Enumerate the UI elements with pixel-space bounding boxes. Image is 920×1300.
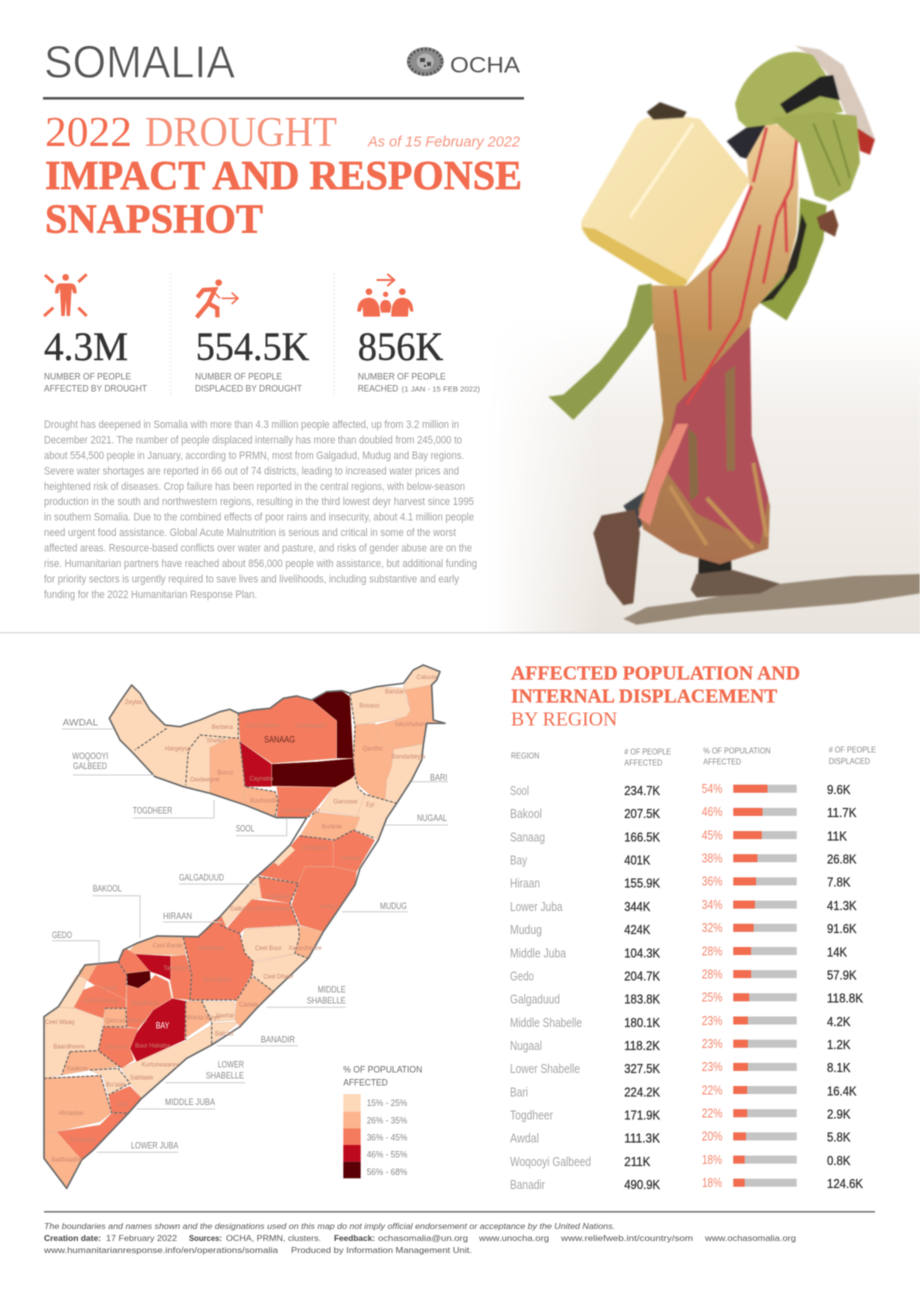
map north regions bbox=[109, 665, 445, 992]
text block: situation overview: need urgent food assistance. Global Acute Malnutrition is serious and critical in some of the worst bbox=[44, 527, 456, 539]
map leader labels: BARI bbox=[430, 773, 447, 784]
row: Galgaduud: Galgaduud bbox=[510, 993, 560, 1007]
row: Bakool: 207.5K bbox=[624, 807, 661, 821]
heading: affected population by region: BY REGION bbox=[511, 709, 617, 731]
map region names bbox=[156, 734, 295, 1031]
row: Middle Juba bbox=[510, 944, 848, 960]
row: Nugaal: 23% bbox=[702, 1037, 722, 1051]
map district labels: Iskushuban bbox=[395, 722, 426, 728]
text block: situation overview: affected areas. Resource-based conflicts over water and pasture, and risks of gender abuse are on the bbox=[44, 543, 472, 555]
row: Nugaal: 1.2K bbox=[827, 1038, 851, 1052]
row: Bari bbox=[510, 1083, 857, 1099]
header rule bbox=[43, 97, 524, 100]
divider: photo section base line bbox=[0, 632, 920, 634]
row: Sool bbox=[510, 782, 851, 798]
footer text: 17 February 2022 bbox=[106, 1233, 177, 1243]
map region names: SANAAG bbox=[264, 734, 295, 746]
map boundaries bbox=[44, 665, 445, 1188]
legend: % of population affected: AFFECTED bbox=[343, 1078, 388, 1089]
row: Sool: 234.7K bbox=[624, 784, 661, 798]
footer text bbox=[43, 1221, 796, 1255]
table header: DISPLACED bbox=[829, 757, 870, 766]
row: Bari: 224.2K bbox=[624, 1085, 661, 1099]
legend: % of population affected: 36% - 45% bbox=[367, 1133, 408, 1144]
map leader labels: GALBEED bbox=[73, 761, 107, 772]
row: Sool: 9.6K bbox=[827, 783, 851, 797]
row: Mudug: 91.6K bbox=[827, 922, 857, 936]
stat: people displaced: 554.5K bbox=[196, 324, 309, 369]
row: Sanaag: 45% bbox=[702, 828, 722, 842]
map: Somalia population affected choropleth: Buur Hakaba bbox=[135, 1043, 171, 1049]
heading: 2022 drought: 2022 bbox=[45, 110, 132, 156]
heading: 2022 drought: DROUGHT bbox=[145, 110, 337, 156]
map district labels: Bandar bbox=[385, 689, 404, 695]
row: Awdal: Awdal bbox=[510, 1132, 539, 1146]
row: Hiraan: 155.9K bbox=[624, 877, 661, 891]
row: Togdheer: 171.9K bbox=[624, 1108, 661, 1122]
heading: impact and response snapshot bbox=[45, 152, 522, 242]
map leader labels: BANADIR bbox=[261, 1034, 295, 1045]
row: Mudug bbox=[510, 921, 857, 937]
map: Somalia population affected choropleth: Badhaadhe bbox=[52, 1158, 83, 1164]
footer text: Feedback: bbox=[334, 1233, 375, 1243]
row: Bay bbox=[510, 852, 857, 868]
stat: people displaced: NUMBER OF PEOPLE bbox=[195, 371, 282, 382]
heading: 2022 drought bbox=[45, 110, 337, 156]
row: Sanaag: 166.5K bbox=[624, 830, 661, 844]
row: Hiraan: 7.8K bbox=[827, 876, 851, 890]
footer text: ochasomalia@un.org bbox=[378, 1233, 468, 1243]
row: Gedo bbox=[510, 967, 857, 983]
row: Hiraan: 36% bbox=[702, 875, 722, 889]
icon: person affected bbox=[44, 274, 87, 316]
row: Woqooyi Galbeed: 211K bbox=[624, 1155, 651, 1169]
text block: situation overview: in southern Somalia. Due to the combined effects of poor rains and insecurity, about 4.1 million people bbox=[44, 512, 474, 524]
heading: affected population by region: INTERNAL DISPLACEMENT bbox=[511, 686, 778, 708]
map district labels: Xarardheere bbox=[288, 946, 322, 952]
heading: impact and response snapshot: SNAPSHOT bbox=[45, 196, 263, 242]
row: Hiraan bbox=[510, 875, 851, 891]
row: Lower Juba: Lower Juba bbox=[510, 900, 563, 914]
map district labels: Owdweyne bbox=[190, 778, 220, 784]
row: Togdheer: 2.9K bbox=[827, 1108, 851, 1122]
row: Galgaduud: 183.8K bbox=[624, 993, 661, 1007]
map district labels: Qardho bbox=[363, 747, 383, 753]
map region names: BAY bbox=[156, 1020, 170, 1031]
heading: affected population by region: AFFECTED POPULATION AND bbox=[511, 662, 800, 684]
stat: people displaced: DISPLACED BY DROUGHT bbox=[195, 384, 302, 395]
logo: UN emblem and OCHA bbox=[407, 47, 520, 77]
text block: situation overview: rise. Humanitarian partners have reached about 856,000 people with assistance, but additional funding bbox=[44, 558, 477, 570]
table header: AFFECTED bbox=[703, 757, 741, 766]
map: Somalia population affected choropleth: Qansax Dheere bbox=[105, 1019, 148, 1025]
row: Lower Shabelle: 8.1K bbox=[827, 1061, 851, 1075]
map district labels: Jariiban bbox=[340, 856, 361, 862]
legend: % of population affected: 56% - 68% bbox=[367, 1167, 408, 1178]
stat: people reached: REACHED bbox=[358, 384, 398, 395]
map district labels: Garoowe bbox=[333, 799, 358, 805]
row: Bari: Bari bbox=[510, 1085, 528, 1099]
row: Sanaag: 11K bbox=[827, 829, 848, 843]
text block: situation overview: Drought has deepened in Somalia with more than 4.3 million people affected, up from 3.2 million in bbox=[44, 419, 459, 431]
row: Banadir: 490.9K bbox=[624, 1178, 661, 1192]
row: Bakool: 11.7K bbox=[827, 806, 857, 820]
icon: people reached bbox=[357, 274, 413, 317]
logo: UN emblem and OCHA: OCHA bbox=[450, 52, 520, 77]
map leader labels bbox=[52, 718, 448, 1152]
text block: situation overview bbox=[44, 419, 477, 601]
stat: people affected: NUMBER OF PEOPLE bbox=[44, 371, 131, 382]
date: As of 15 February 2022 bbox=[367, 135, 520, 151]
row: Bari: 22% bbox=[702, 1083, 722, 1097]
legend: % of population affected: 26% - 35% bbox=[367, 1115, 408, 1126]
map district labels: Burtinle bbox=[322, 824, 343, 830]
map district labels: Hobyo bbox=[320, 904, 338, 910]
map leader labels: BAKOOL bbox=[93, 884, 122, 895]
row: Bari: 16.4K bbox=[827, 1084, 857, 1098]
map leader labels: SHABELLE bbox=[206, 1070, 244, 1081]
row: Middle Shabelle: 23% bbox=[702, 1014, 722, 1028]
row: Nugaal: Nugaal bbox=[510, 1039, 542, 1053]
map: Somalia population affected choropleth: Kismaayo bbox=[69, 1138, 96, 1144]
map: Somalia population affected choropleth: Tayeeglow bbox=[163, 966, 192, 972]
map district labels: Bulo Burto bbox=[203, 978, 232, 984]
map leader labels: SHABELLE bbox=[307, 995, 346, 1006]
map district labels: Ceel Buur bbox=[255, 946, 282, 952]
heading: affected population by region bbox=[511, 662, 800, 731]
row: Togdheer: 22% bbox=[702, 1106, 722, 1120]
table header: # OF PEOPLE bbox=[624, 747, 671, 756]
row: Lower Juba: 344K bbox=[624, 900, 651, 914]
row: Woqooyi Galbeed bbox=[510, 1153, 851, 1169]
map district labels: Burco bbox=[217, 770, 234, 776]
text block: situation overview: production in the south and northwestern regions, resulting in the third lowest deyr harvest since 1995 bbox=[44, 496, 474, 508]
stat: people reached: (1 JAN - 15 FEB 2022) bbox=[402, 385, 481, 394]
map leader labels: TOGDHEER bbox=[133, 805, 172, 816]
map leader labels: AWDAL bbox=[63, 718, 98, 729]
text block: situation overview: for priority sectors is urgently required to save lives and livelihoods, including substantive and early bbox=[44, 574, 460, 586]
row: Lower Shabelle bbox=[510, 1060, 851, 1076]
footer text: OCHA, PRMN, clusters. bbox=[226, 1233, 321, 1243]
row: Mudug: 424K bbox=[624, 923, 651, 937]
row: Mudug: Mudug bbox=[510, 923, 542, 937]
row: Bay: Bay bbox=[510, 854, 528, 868]
row: Bakool bbox=[510, 805, 857, 821]
map: Somalia population affected choropleth: Garbahaarey bbox=[83, 999, 118, 1005]
legend: % of population affected bbox=[343, 1065, 422, 1178]
table header: % OF POPULATION bbox=[703, 746, 771, 755]
map district labels bbox=[125, 675, 438, 984]
stat: people affected: 4.3M bbox=[44, 324, 128, 369]
row: Banadir: Banadir bbox=[510, 1178, 545, 1192]
map leader labels: LOWER JUBA bbox=[131, 1140, 179, 1151]
row: Lower Shabelle: 23% bbox=[702, 1060, 722, 1074]
map: Somalia population affected choropleth: Kurtunwaarey bbox=[142, 1063, 179, 1069]
map district labels: Eyl bbox=[366, 803, 374, 809]
text block: situation overview: December 2021. The number of people displaced internally has more than doubled from 245,000 to bbox=[44, 434, 462, 446]
legend: % of population affected: % OF POPULATION bbox=[343, 1065, 422, 1076]
stat: people reached: NUMBER OF PEOPLE bbox=[358, 371, 446, 382]
map leader labels: NUGAAL bbox=[417, 813, 447, 824]
map: Somalia population affected choropleth: Jilib bbox=[117, 1103, 128, 1109]
footer rule bbox=[44, 1211, 875, 1213]
row: Middle Juba: 14K bbox=[827, 945, 848, 959]
row: Middle Shabelle: 180.1K bbox=[624, 1016, 661, 1030]
stat: people reached: 856K bbox=[358, 324, 443, 369]
map leader labels: HIRAAN bbox=[163, 911, 192, 922]
map district labels: Caluula bbox=[417, 675, 438, 681]
row: Gedo: Gedo bbox=[510, 969, 534, 983]
text block: situation overview: funding for the 2022 Humanitarian Response Plan. bbox=[44, 589, 257, 601]
map leader labels: SOOL bbox=[236, 824, 254, 835]
footer text: www.reliefweb.int/country/som bbox=[560, 1233, 693, 1243]
map leader labels: WOQOOYI bbox=[72, 751, 108, 762]
map: Somalia population affected choropleth: Bu'aale bbox=[106, 1083, 126, 1089]
map district labels: Laas Caanood bbox=[281, 809, 320, 815]
map: Somalia population affected choropleth bbox=[44, 665, 445, 1188]
row: Mudug: 32% bbox=[702, 921, 722, 935]
row: Nugaal bbox=[510, 1037, 851, 1053]
row: Gedo: 204.7K bbox=[624, 969, 661, 983]
map district labels: Caynabo bbox=[249, 777, 274, 783]
row: Lower Juba: 34% bbox=[702, 898, 722, 912]
table header: REGION bbox=[511, 751, 539, 760]
row: Nugaal: 118.2K bbox=[624, 1039, 661, 1053]
map: Somalia population affected choropleth: Baardheere bbox=[53, 1044, 85, 1050]
map district labels: Matabaan bbox=[198, 946, 225, 952]
map leader labels: MUDUG bbox=[380, 901, 407, 912]
map: Somalia population affected choropleth: Diinsoor bbox=[105, 1045, 127, 1051]
map district labels: Hargeysa bbox=[165, 747, 191, 753]
map district labels: Galkacyo Dhusamareeb bbox=[230, 907, 295, 913]
map district labels: Zeylac bbox=[125, 700, 143, 706]
row: Bay: 38% bbox=[702, 852, 722, 866]
map: Somalia population affected choropleth: Balcad bbox=[215, 1032, 233, 1038]
row: Bakool: 46% bbox=[702, 805, 722, 819]
map district labels: Bosaso bbox=[359, 703, 380, 709]
row: Galgaduud: 25% bbox=[702, 991, 722, 1005]
map district labels: Galdogob bbox=[302, 845, 328, 851]
map district labels: Sheikh bbox=[207, 738, 225, 744]
row: Awdal: 20% bbox=[702, 1130, 722, 1144]
table header: # OF PEOPLE bbox=[829, 746, 876, 755]
icon: person displaced bbox=[197, 279, 238, 317]
table rows bbox=[510, 782, 864, 1192]
row: Banadir: 18% bbox=[702, 1176, 722, 1190]
text block: situation overview: Severe water shortages are reported in 66 out of 74 districts, leading to increased water prices and bbox=[44, 465, 459, 477]
row: Banadir bbox=[510, 1176, 864, 1192]
map leader labels: GEDO bbox=[52, 930, 72, 941]
row: Awdal: 111.3K bbox=[624, 1132, 661, 1146]
row: Togdheer: Togdheer bbox=[510, 1108, 553, 1122]
row: Middle Shabelle: 4.2K bbox=[827, 1015, 851, 1029]
stat: people affected bbox=[44, 324, 147, 395]
row: Middle Shabelle: Middle Shabelle bbox=[510, 1016, 582, 1030]
row: Middle Juba: Middle Juba bbox=[510, 946, 566, 960]
map: Somalia population affected choropleth: Baydhaba bbox=[132, 1001, 159, 1007]
legend: % of population affected: 46% - 55% bbox=[367, 1150, 408, 1161]
row: Middle Juba: 28% bbox=[702, 944, 722, 958]
row: Bay: 26.8K bbox=[827, 852, 857, 866]
map district labels: Ceel Afweyn bbox=[246, 724, 279, 730]
row: Lower Shabelle: 327.5K bbox=[624, 1062, 661, 1076]
row: Sool: Sool bbox=[510, 784, 529, 798]
row: Sool: 54% bbox=[702, 782, 722, 796]
footer text: Creation date: bbox=[44, 1233, 101, 1243]
footer text: Sources: bbox=[189, 1233, 222, 1243]
row: Lower Juba bbox=[510, 898, 857, 914]
map: Somalia population affected choropleth: Ceel Barde bbox=[153, 943, 183, 949]
footer text: www.humanitarianresponse.info/en/operations/somalia bbox=[43, 1245, 278, 1255]
table header bbox=[511, 746, 876, 768]
row: Lower Shabelle: Lower Shabelle bbox=[510, 1062, 580, 1076]
text block: situation overview: about 554,500 people in January, according to PRMN, most from Galgadud, Mudug and Bay regions. bbox=[44, 450, 464, 462]
footer text: The boundaries and names shown and the designations used on this map do not imply official endorsement or acceptance by the United Nations. bbox=[44, 1221, 615, 1231]
row: Galgaduud bbox=[510, 991, 864, 1007]
map leader labels: LOWER bbox=[218, 1060, 244, 1071]
table header: AFFECTED bbox=[624, 759, 662, 768]
map: Somalia population affected choropleth: Jowhar bbox=[215, 1014, 234, 1020]
stat: people affected: AFFECTED BY DROUGHT bbox=[44, 384, 147, 395]
row: Togdheer bbox=[510, 1106, 851, 1122]
photo: woman carrying a jerrycan bbox=[490, 46, 920, 632]
map district labels: Cadaado bbox=[267, 894, 292, 900]
row: Sanaag bbox=[510, 828, 848, 844]
map: Somalia population affected choropleth: Luuq bbox=[103, 985, 117, 991]
row: Gedo: 57.9K bbox=[827, 968, 857, 982]
map district labels: Ceel Dheer bbox=[263, 974, 294, 980]
map leader labels: GALGADUUD bbox=[179, 873, 224, 884]
row: Bakool: Bakool bbox=[510, 807, 542, 821]
heading: impact and response snapshot: IMPACT AND RESPONSE bbox=[45, 152, 522, 198]
row: Middle Juba: 104.3K bbox=[624, 946, 661, 960]
legend: % of population affected: 15% - 25% bbox=[367, 1098, 408, 1109]
row: Bay: 401K bbox=[624, 854, 651, 868]
row: Woqooyi Galbeed: 18% bbox=[702, 1153, 722, 1167]
row: Sanaag: Sanaag bbox=[510, 830, 545, 844]
map leader labels: MIDDLE bbox=[318, 985, 346, 996]
footer text: www.ochasomalia.org bbox=[704, 1233, 796, 1243]
map: Somalia population affected choropleth: Sablaale bbox=[130, 1075, 154, 1081]
row: Hiraan: Hiraan bbox=[510, 877, 540, 891]
map district labels: Berbera bbox=[212, 725, 234, 731]
map district labels: Bandarbeyla bbox=[392, 754, 426, 760]
title: SOMALIA: SOMALIA bbox=[44, 36, 235, 87]
row: Galgaduud: 118.8K bbox=[827, 992, 864, 1006]
stat: people displaced bbox=[195, 324, 309, 395]
map: Somalia population affected choropleth: Saakow bbox=[67, 1067, 89, 1073]
row: Gedo: 28% bbox=[702, 967, 722, 981]
footer text: Produced by Information Management Unit. bbox=[291, 1245, 472, 1255]
row: Awdal bbox=[510, 1130, 851, 1146]
footer text: www.unocha.org bbox=[478, 1233, 549, 1243]
map district labels: Ceerigaabo bbox=[295, 724, 327, 730]
map district labels: Buuhoodle bbox=[250, 799, 279, 805]
row: Lower Juba: 41.3K bbox=[827, 899, 857, 913]
row: Awdal: 5.8K bbox=[827, 1131, 851, 1145]
map: Somalia population affected choropleth: Ceel Waaq bbox=[45, 1020, 74, 1026]
text block: situation overview: heightened risk of diseases. Crop failure has been reported in the central regions, with below-season bbox=[44, 481, 465, 493]
map: Somalia population affected choropleth: Wanla Weyn bbox=[187, 1015, 220, 1021]
row: Banadir: 124.6K bbox=[827, 1177, 864, 1191]
row: Middle Shabelle bbox=[510, 1014, 851, 1030]
stat: people reached bbox=[358, 324, 481, 395]
map south regions bbox=[44, 917, 275, 1188]
map: Somalia population affected choropleth: Cadale bbox=[239, 1003, 259, 1009]
map: Somalia population affected choropleth: Afmadow bbox=[58, 1111, 84, 1117]
map leader labels: MIDDLE JUBA bbox=[165, 1097, 216, 1108]
row: Woqooyi Galbeed: Woqooyi Galbeed bbox=[510, 1155, 591, 1169]
row: Woqooyi Galbeed: 0.8K bbox=[827, 1154, 851, 1168]
